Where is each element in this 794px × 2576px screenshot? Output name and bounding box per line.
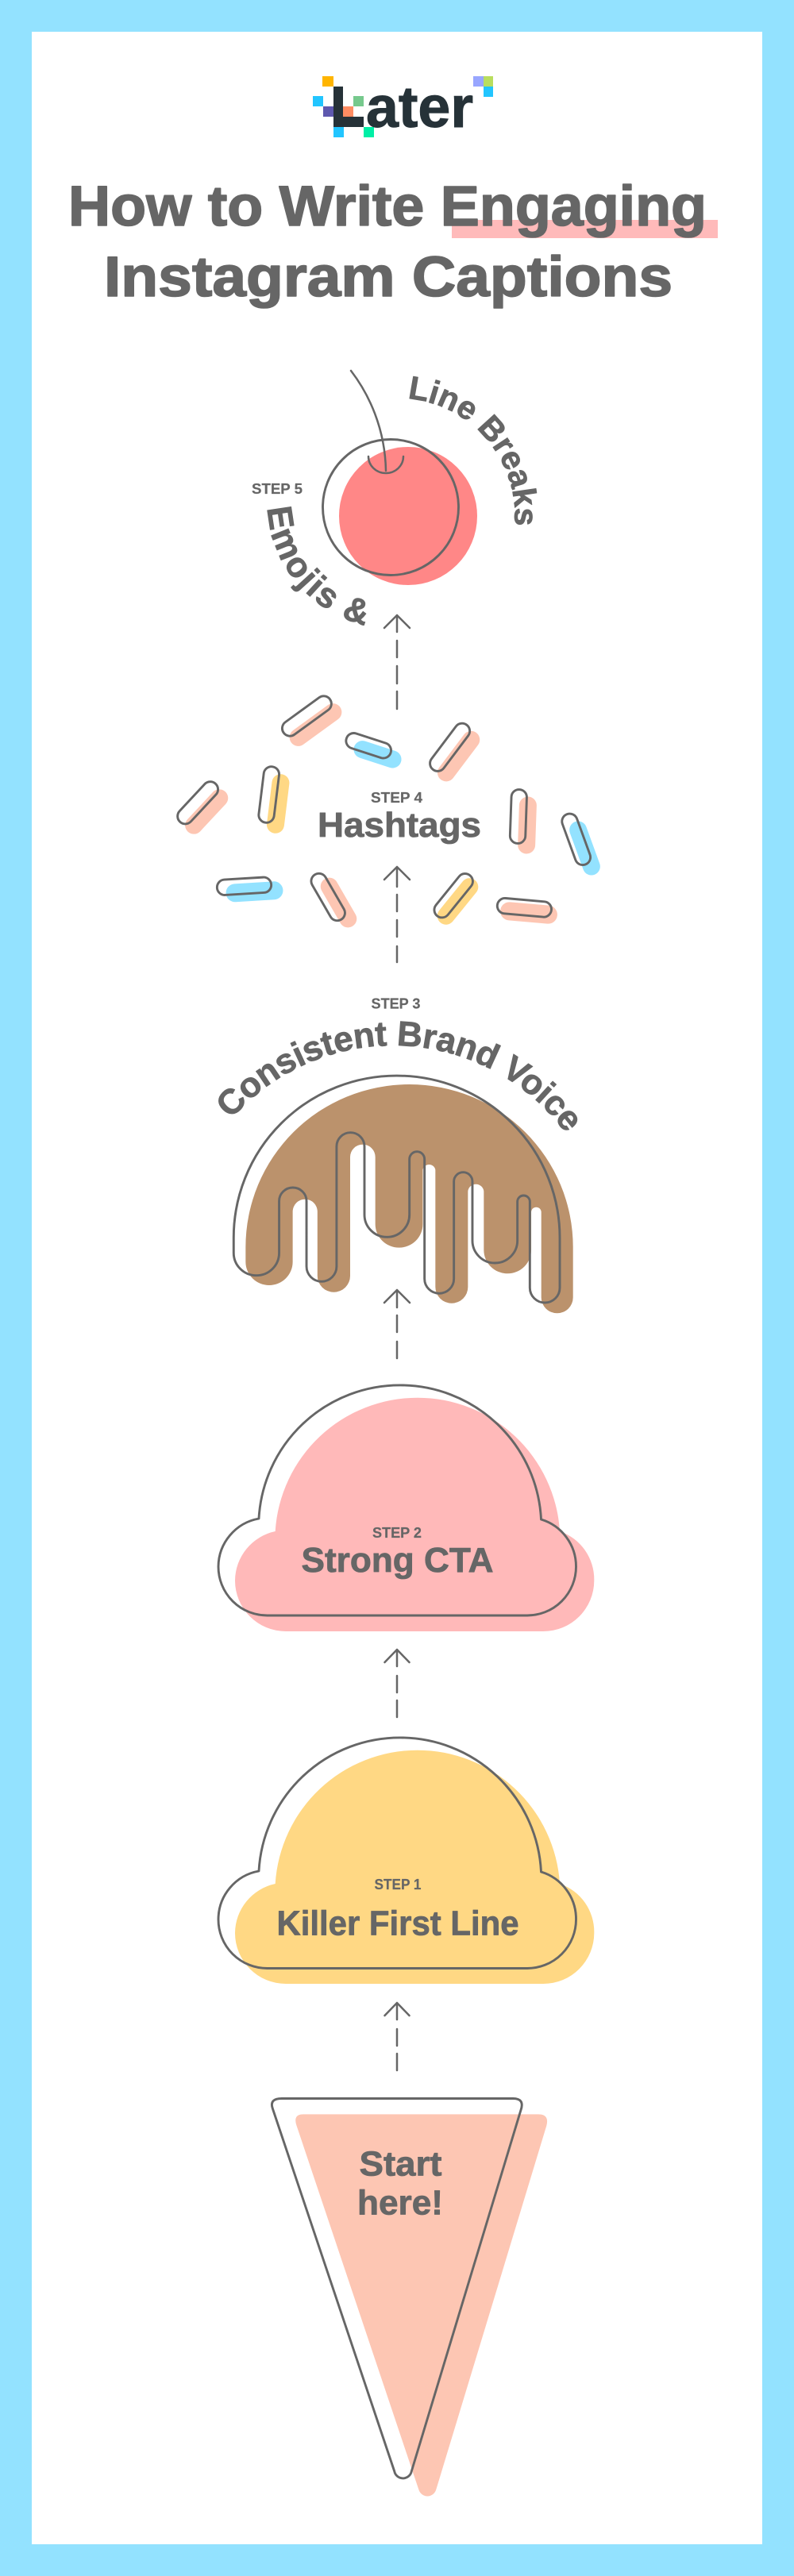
start here text <box>357 2145 443 2223</box>
sprinkle 7 <box>560 811 603 878</box>
sprinkle 9 <box>308 871 360 930</box>
arrow: step 3 to step 4 <box>384 867 410 962</box>
chocolate fill <box>245 1084 573 1313</box>
sprinkle 3 <box>427 720 484 785</box>
sprinkle 8 <box>217 877 283 903</box>
arrow: cone to step 1 <box>384 2003 410 2070</box>
sprinkle 10 <box>431 871 482 928</box>
sprinkle 5 <box>258 766 291 834</box>
ice cream cone <box>272 2099 547 2497</box>
sprinkle 1 <box>279 693 345 749</box>
title <box>68 175 707 309</box>
step 3: chocolate drip <box>233 1076 573 1313</box>
curved text: Consistent Brand Voice: Consistent Brand Voice <box>218 1021 578 1130</box>
curved text: Emojis &: Emojis & <box>267 506 367 626</box>
logo: Later <box>313 75 493 140</box>
step 2 label: STEP 2 <box>372 1525 422 1541</box>
title: How to Write Engaging <box>68 175 707 238</box>
step 5 label: STEP 5 <box>252 481 303 497</box>
sprinkle 2 <box>344 731 403 770</box>
yellow scoop fill <box>235 1750 594 1984</box>
yellow scoop outline <box>218 1738 576 1969</box>
title highlight bar <box>452 220 718 238</box>
chocolate outline <box>233 1076 560 1303</box>
sprinkle 11 <box>496 898 558 925</box>
step 4 heading: Hashtags <box>318 806 481 845</box>
step 4: sprinkles <box>175 693 603 930</box>
cone fill <box>295 2114 547 2497</box>
step 1: yellow scoop <box>218 1738 594 1984</box>
pink scoop fill <box>235 1398 594 1631</box>
start here text: here! <box>357 2183 443 2223</box>
logo: Later: ater <box>366 75 473 140</box>
arrow: step 2 to step 3 <box>384 1290 410 1358</box>
cherry outline <box>322 440 459 575</box>
cone outline <box>272 2099 522 2478</box>
arrow: step 4 to step 5 <box>384 615 410 709</box>
arrow: step 1 to step 2 <box>384 1650 410 1717</box>
curved text: Line Breaks: Line Breaks <box>409 376 537 526</box>
cherry stem <box>351 371 403 473</box>
step 3 label: STEP 3 <box>372 995 421 1011</box>
step 4 label: STEP 4 <box>371 790 422 806</box>
start here text: Start <box>359 2145 442 2183</box>
sprinkle 4 <box>175 779 232 837</box>
cherry fill <box>339 447 477 585</box>
step 1 label: STEP 1 <box>375 1877 421 1893</box>
title: Instagram Captions <box>104 246 673 309</box>
step 2 heading: Strong CTA <box>302 1541 494 1580</box>
pink scoop outline <box>218 1385 576 1615</box>
sprinkle 6 <box>510 789 537 854</box>
step 1 heading: Killer First Line <box>276 1904 519 1943</box>
step 2: pink scoop <box>218 1385 594 1631</box>
step 5: cherry <box>322 371 477 585</box>
